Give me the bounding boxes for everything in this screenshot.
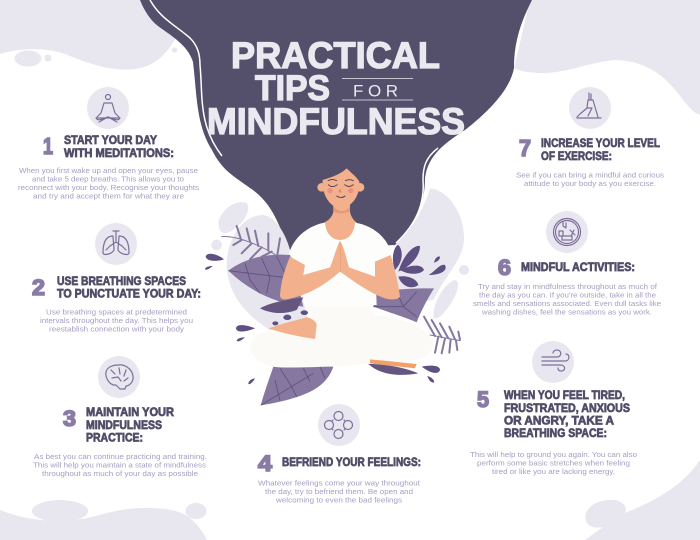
tip 3: 3 <box>63 406 76 431</box>
title: FOR <box>353 82 398 100</box>
tip 3: MAINTAIN YOUR <box>86 407 175 419</box>
tip 4: welcoming to even the bad feelings <box>275 496 402 504</box>
tip 7: INCREASE YOUR LEVEL <box>541 138 660 150</box>
tip 4: 4 <box>258 451 273 476</box>
tip 1: When you first wake up and open your eyes, pause <box>19 166 198 175</box>
leaves <box>228 255 434 405</box>
hair <box>140 0 532 250</box>
title <box>207 35 465 142</box>
tip 5: WHEN YOU FEEL TIRED, <box>504 390 625 402</box>
tip 7: attitude to your body as you exercise. <box>524 179 656 188</box>
fern right <box>424 317 460 353</box>
tip 4: BEFRIEND YOUR FEELINGS: <box>282 457 421 469</box>
tip 2: TO PUNCTUATE YOUR DAY: <box>57 288 201 300</box>
tip 2: intervals throughout the day. This helps you <box>40 316 193 325</box>
tip 1: 1 <box>43 133 53 159</box>
tip 2: reestablish connection with your body <box>49 324 184 334</box>
tip 3: throughout as much of your day as possible <box>42 469 198 478</box>
tip 4 <box>258 404 421 504</box>
icon: activities <box>546 211 588 253</box>
tip 5: OR ANGRY, TAKE A <box>504 416 614 428</box>
tip 7: 7 <box>519 135 531 161</box>
fern left <box>222 226 280 259</box>
tip 3: As best you can continue practicing and training. <box>34 452 207 461</box>
neck and face <box>324 197 357 240</box>
icon: feelings <box>318 404 360 446</box>
icon: yoga pose <box>569 87 611 129</box>
tip 2: 2 <box>32 275 45 300</box>
background blob: bottom right <box>585 460 700 540</box>
title: MINDFULNESS <box>207 101 465 142</box>
tip 6: MINDFUL ACTIVITIES: <box>521 262 635 274</box>
tip 6: washing dishes, feel the sensations as you work. <box>481 308 652 316</box>
background blob: top left <box>0 0 180 70</box>
tip 2 <box>32 223 201 334</box>
tip 5 <box>470 341 637 476</box>
tip 1 <box>18 87 199 200</box>
tip 1: reconnect with your body. Recognise your thoughts <box>18 183 199 192</box>
arms and hands <box>280 241 400 299</box>
tip 7 <box>516 87 664 188</box>
tip 6: 6 <box>498 255 511 280</box>
tip 4: Whatever feelings come your way throughout <box>258 478 421 488</box>
background blob: bottom left <box>0 500 207 540</box>
crossed legs <box>250 306 433 367</box>
tip 3 <box>33 356 207 478</box>
tip 7: See if you can bring a mindful and curious <box>516 170 664 180</box>
tip 6: smells and sensations associated. Even dull tasks like <box>473 299 661 308</box>
tip 5: This will help to ground you again. You can also <box>470 450 637 459</box>
tip 1: WITH MEDITATIONS: <box>64 148 174 160</box>
tip 3: This will help you maintain a state of mindfulness <box>33 460 206 470</box>
title: TIPS <box>255 69 330 108</box>
tip 3: MINDFULNESS <box>86 420 162 432</box>
tip 6: the day as you can. If you're outside, take in all the <box>479 290 656 300</box>
tip 5: FRUSTRATED, ANXIOUS <box>504 403 630 415</box>
body and shirt <box>289 223 391 305</box>
icon: meditation <box>87 87 129 129</box>
background blob: top right <box>514 0 700 115</box>
icon: wind <box>532 341 574 383</box>
tip 6: Try and stay in mindfulness throughout as much of <box>478 282 658 291</box>
lilac blobs behind figure <box>211 188 469 330</box>
tip 3: PRACTICE: <box>86 432 143 444</box>
petals <box>205 245 446 384</box>
illustration: meditating woman <box>205 168 469 405</box>
tip 1: and take 5 deep breaths. This allows you to <box>32 174 184 184</box>
tip 2: USE BREATHING SPACES <box>57 276 186 288</box>
tip 2: Use breathing spaces at predetermined <box>46 308 187 316</box>
icon: brain <box>98 356 140 398</box>
tip 7: OF EXERCISE: <box>541 151 612 163</box>
title: PRACTICAL <box>231 35 440 76</box>
tip 6 <box>473 211 661 316</box>
tip 5: perform some basic stretches when feeling <box>477 458 630 468</box>
tip 5: 5 <box>477 387 489 412</box>
tip 5: BREATHING SPACE: <box>504 428 607 440</box>
tip 5: tired or like you are lacking energy. <box>492 467 615 476</box>
tip 1: and try and accept them for what they are <box>33 192 184 200</box>
tip 4: the day, try to befriend them. Be open and <box>265 487 413 496</box>
icon: lungs <box>95 223 137 265</box>
tip 1: START YOUR DAY <box>64 135 157 147</box>
